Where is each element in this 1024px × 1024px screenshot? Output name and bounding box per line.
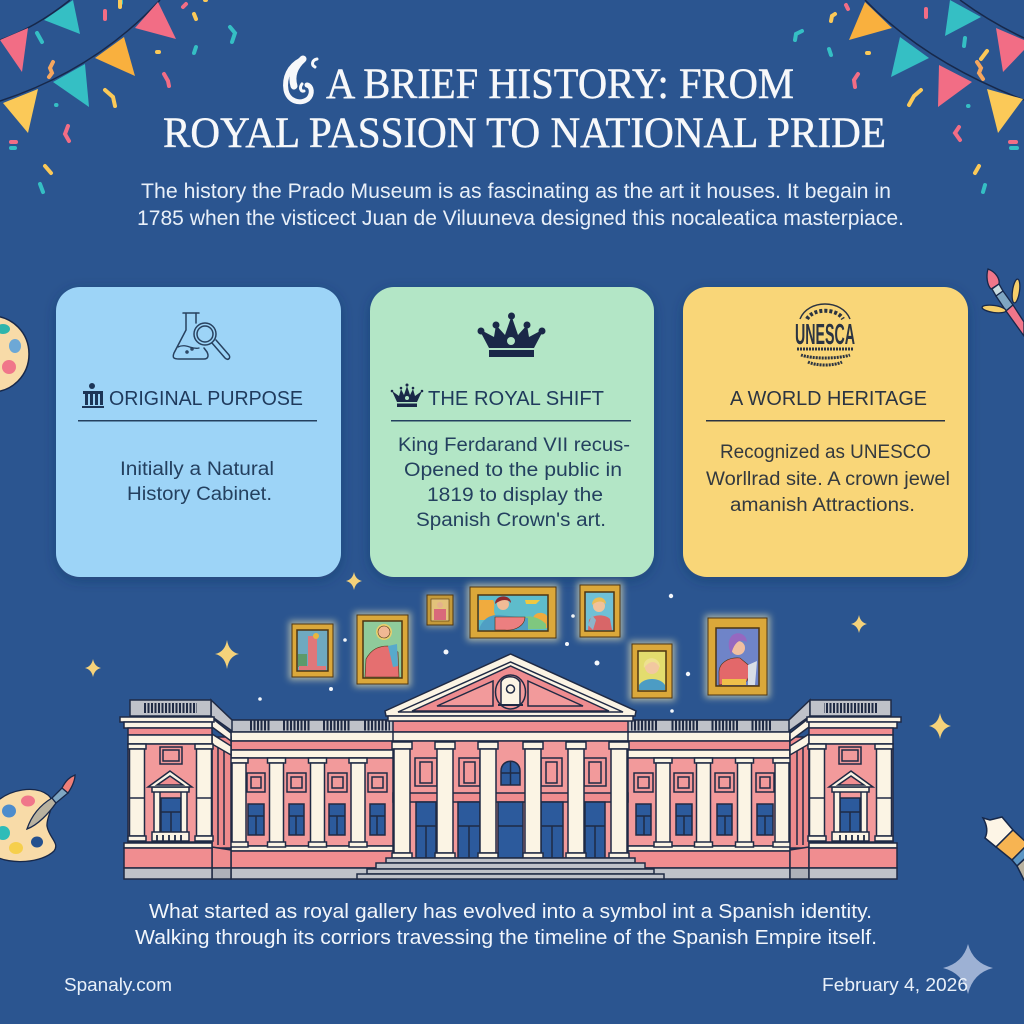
closing text: What started as royal gallery has evolved into a symbol int a Spanish identity. bbox=[149, 901, 872, 923]
intro text: 1785 when the visticect Juan de Viluuneva designed this nocaleatica masterpiace. bbox=[137, 207, 904, 230]
body text: Spanish Crown's art. bbox=[416, 510, 606, 531]
painting 4 bbox=[467, 584, 559, 641]
painting 2 bbox=[354, 612, 411, 687]
painting 1 bbox=[289, 621, 336, 680]
body text: amanish Attractions. bbox=[730, 495, 915, 516]
panel: a world heritage bbox=[683, 287, 968, 577]
body text: Opened to the public in bbox=[404, 460, 622, 481]
icon: flask and magnifier bbox=[173, 313, 230, 359]
icon: small crown bbox=[391, 384, 423, 407]
body text: History Cabinet. bbox=[127, 484, 272, 505]
icon: title ornament bbox=[286, 59, 317, 102]
painting 7 bbox=[705, 615, 770, 698]
icon: UNESCA stamp bbox=[795, 304, 855, 365]
icon: museum building small bbox=[82, 383, 104, 408]
body text bbox=[120, 459, 274, 505]
body text bbox=[706, 442, 950, 516]
title: ROYAL PASSION TO NATIONAL PRIDE bbox=[163, 110, 886, 157]
body text bbox=[398, 435, 630, 531]
gold sparkles bbox=[85, 572, 951, 739]
decoration: pen bottom right bbox=[983, 817, 1024, 880]
heading: THE ROYAL SHIFT bbox=[428, 388, 604, 410]
icon: large crown bbox=[478, 312, 546, 357]
body text: 1819 to display the bbox=[427, 485, 603, 506]
closing text: Walking through its corriors travessing the timeline of the Spanish Empire itself. bbox=[135, 927, 877, 949]
heading: ORIGINAL PURPOSE bbox=[109, 388, 303, 410]
panel: the royal shift bbox=[370, 287, 654, 577]
decoration: palette with brush bottom left bbox=[0, 775, 75, 862]
title bbox=[163, 59, 886, 157]
painting 6 bbox=[629, 641, 675, 701]
confetti bbox=[11, 0, 1017, 192]
body text: Worllrad site. A crown jewel bbox=[706, 469, 950, 490]
footer: site name: Spanaly.com bbox=[64, 975, 172, 995]
bunting: top right bbox=[849, 0, 1024, 133]
building: right half bbox=[506, 700, 901, 879]
building: central pediment bbox=[385, 654, 636, 721]
painting 5 bbox=[577, 582, 623, 640]
heading: A WORLD HERITAGE bbox=[730, 388, 927, 410]
building: arched window bbox=[501, 761, 520, 785]
bunting: top left bbox=[0, 0, 176, 133]
decoration: brush top right bbox=[982, 269, 1024, 336]
building: left half bbox=[120, 700, 515, 879]
closing text bbox=[135, 901, 877, 949]
title: A BRIEF HISTORY: FROM bbox=[326, 61, 794, 108]
panel: original purpose bbox=[56, 287, 341, 577]
sparkle: footer star bbox=[943, 944, 993, 994]
body text: Recognized as UNESCO bbox=[720, 442, 931, 463]
white dots bbox=[258, 594, 690, 713]
decoration: palette left bbox=[0, 316, 29, 392]
building: Prado Museum bbox=[120, 654, 901, 879]
panel: a world heritage: UNESCA bbox=[795, 319, 855, 351]
body text: Initially a Natural bbox=[120, 459, 274, 480]
intro text bbox=[137, 180, 904, 230]
painting 3 bbox=[425, 593, 455, 627]
body text: King Ferdarand VII recus- bbox=[398, 435, 630, 456]
intro text: The history the Prado Museum is as fascinating as the art it houses. It begain in bbox=[141, 180, 891, 203]
footer: date: February 4, 2026 bbox=[822, 975, 968, 995]
